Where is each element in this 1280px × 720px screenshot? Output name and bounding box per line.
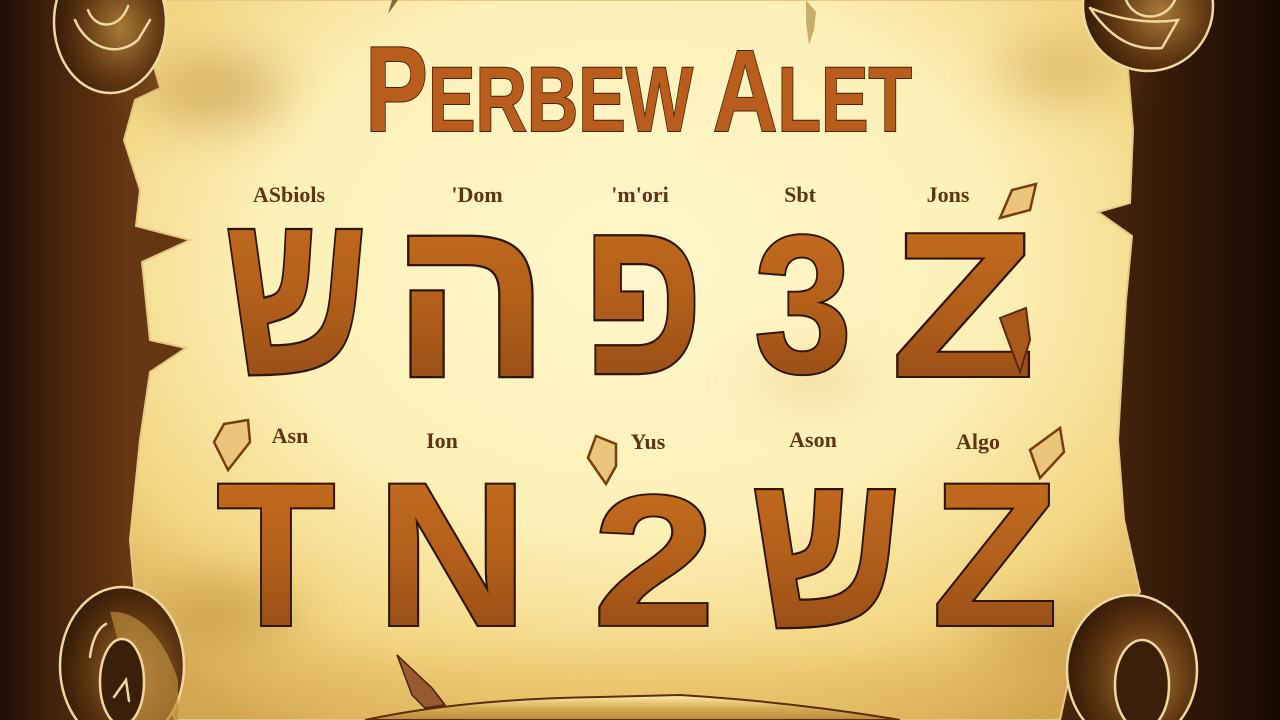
icon: quill center [588, 436, 616, 484]
parchment shading [145, 44, 1120, 710]
icon: quill right [1030, 428, 1064, 478]
icon: bottom right scroll [1067, 595, 1197, 720]
title: PERBEW ALET [365, 21, 912, 157]
icon: torn paper on top row Z [1000, 308, 1030, 372]
bottom row labels: Asn [272, 423, 308, 448]
top row labels: 'm'ori [611, 182, 669, 207]
bottom row letters: 2 [593, 458, 715, 665]
top row letters: פ [582, 169, 704, 421]
icon: top left scroll [54, 0, 166, 93]
bottom row labels: Ion [426, 428, 458, 453]
top row labels: 'Dom [451, 182, 503, 207]
icon: quill top right [1000, 184, 1036, 218]
top row letters: Z [892, 189, 1034, 420]
top row labels [253, 182, 970, 207]
icon: quill left [214, 420, 250, 470]
top row letters: 3 [754, 195, 852, 414]
icon: bottom left scroll [60, 587, 184, 720]
bottom row letters: T [217, 442, 335, 669]
panel: parchment sheet [124, 0, 1140, 720]
bottom row letters: ש [751, 423, 901, 674]
bottom row letters: N [376, 441, 528, 668]
bottom row labels: Algo [956, 429, 1000, 454]
icon: top right scroll [1083, 0, 1213, 71]
bottom row labels: Yus [631, 429, 666, 454]
icon: torn leaf bottom [397, 655, 445, 708]
top row letters: ה [392, 169, 550, 426]
bottom row labels [272, 423, 1000, 454]
bottom row labels: Ason [789, 427, 837, 452]
top row letters [224, 161, 1034, 426]
top row letters: ש [224, 161, 368, 424]
icon: torn mark top left [388, 0, 398, 14]
bottom row letters [217, 423, 1058, 674]
top row labels: Sbt [784, 182, 817, 207]
scroll roll bottom edge [365, 695, 900, 720]
top row labels: Jons [927, 182, 970, 207]
top row labels: ASbiols [253, 182, 326, 207]
icon: torn mark top right [806, 0, 816, 45]
bottom row letters: Z [932, 441, 1058, 669]
